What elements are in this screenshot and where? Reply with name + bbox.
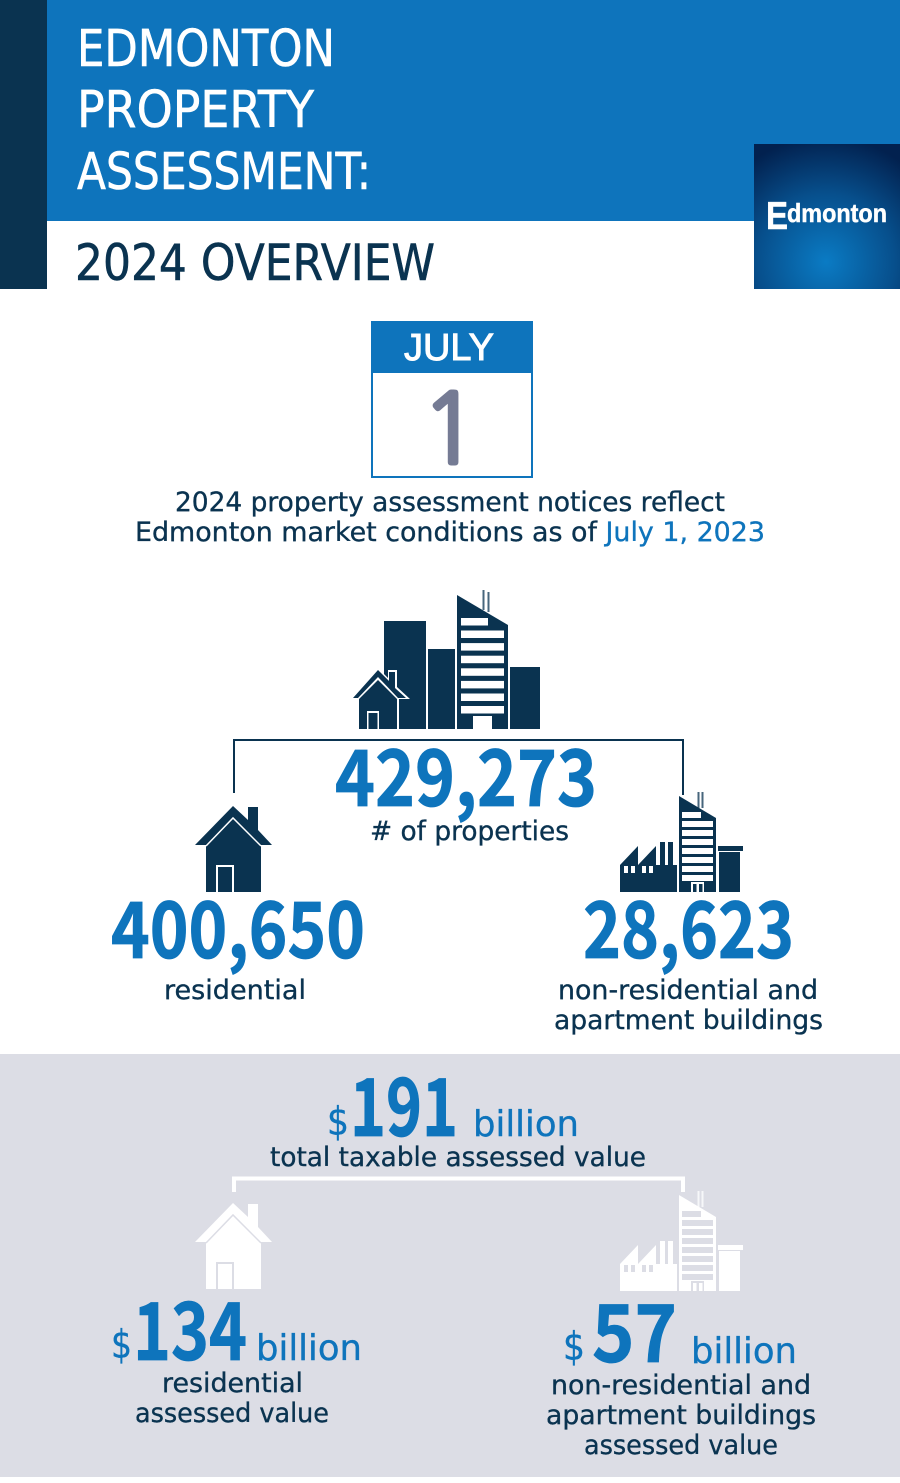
panel: header (0, 0, 900, 292)
stat: residential properties: residential (164, 975, 306, 1006)
connector: value bracket (234, 1178, 683, 1192)
calendar icon: July 1: JULY (404, 327, 494, 369)
stat: non-residential properties: non-residential and (558, 975, 818, 1006)
stat: residential value (111, 1268, 362, 1429)
stat: total taxable value (270, 1044, 646, 1173)
stat: residential value: billion (256, 1328, 362, 1369)
icon: factory and office tower, white (620, 1191, 743, 1291)
stat: total taxable value: billion (473, 1104, 579, 1145)
subtitle: 2024 OVERVIEW (75, 234, 435, 292)
logo: Edmonton: E (766, 195, 788, 238)
title: ASSESSMENT: (77, 143, 371, 202)
stat: total taxable value: 191 (350, 1044, 458, 1160)
stat: non-residential properties: 28,623 (583, 869, 794, 981)
stat: residential properties: 400,650 (111, 869, 365, 981)
icon: residential house, white (195, 1203, 272, 1289)
stat: non-residential value: apartment buildings (546, 1400, 816, 1431)
text: notice date explanation: 2024 property assessment notices reflect (175, 487, 725, 518)
title: PROPERTY (77, 81, 315, 140)
stat: residential value: residential (162, 1368, 303, 1399)
stat: non-residential value: assessed value (584, 1430, 778, 1461)
calendar icon: July 1 (371, 321, 533, 477)
calendar icon: July 1: 1 (421, 381, 479, 477)
icon: factory and office tower (620, 792, 743, 892)
stat: non-residential value (546, 1270, 816, 1461)
stat: non-residential value: $ (563, 1325, 585, 1370)
title (77, 20, 371, 202)
title: EDMONTON (77, 20, 335, 79)
stat: residential value: 134 (133, 1268, 247, 1384)
text: notice date explanation: Edmonton market conditions as of July 1, 2023 (135, 517, 765, 548)
connector: properties bracket (234, 740, 683, 795)
stat: residential value: $ (111, 1323, 132, 1368)
text: notice date explanation (135, 487, 765, 548)
stat: non-residential value: non-residential and (551, 1370, 811, 1401)
stat: non-residential value: billion (691, 1331, 797, 1372)
logo: Edmonton (754, 144, 900, 289)
icon: city skyline with house (350, 590, 540, 729)
panel: assessed value (0, 1044, 900, 1477)
icon: residential house (195, 806, 272, 892)
stat: non-residential properties: apartment buildings (554, 1005, 823, 1036)
stat: non-residential value: 57 (592, 1270, 677, 1386)
logo: Edmonton: dmonton (787, 198, 887, 228)
stat: total taxable value: $ (327, 1100, 349, 1145)
stat: residential value: assessed value (135, 1398, 329, 1429)
stat: total taxable value: total taxable assessed value (270, 1142, 646, 1173)
stat: total properties: # of properties (370, 816, 569, 847)
stat: non-residential properties (554, 869, 823, 1036)
stat: total properties: 429,273 (335, 717, 597, 829)
